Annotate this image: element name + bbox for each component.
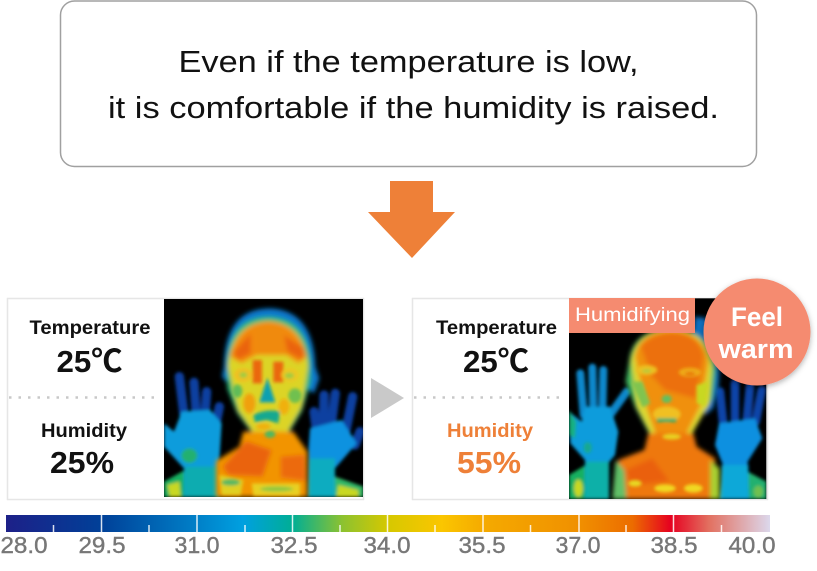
label: humidity: Humidity — [447, 421, 533, 442]
thermal image: after — [569, 298, 766, 499]
tag: humidifying — [569, 298, 695, 333]
badge: feel warm: warm — [717, 334, 794, 364]
arrow: down — [368, 181, 455, 258]
panel: after humidifying — [412, 278, 810, 500]
neck and chest — [216, 432, 307, 497]
badge: feel warm: Feel — [731, 302, 783, 332]
headline line 1: Even if the temperature is low, — [178, 44, 638, 79]
head — [692, 317, 720, 415]
scale labels: 38.5 — [650, 532, 698, 558]
scale labels: 35.5 — [458, 532, 506, 558]
value: humidity 25 percent: 25% — [50, 445, 114, 480]
callout: headline box — [60, 1, 756, 166]
scale labels: 32.5 — [270, 532, 318, 558]
scale labels — [0, 532, 776, 558]
value: temperature 25 C: 25℃ — [56, 344, 122, 379]
shoulders and hands — [569, 368, 766, 499]
colour bar — [6, 515, 770, 532]
scale labels: 40.0 — [728, 532, 776, 558]
label: temperature: Temperature — [30, 318, 150, 339]
arrow: before to after — [371, 378, 404, 418]
value: humidity 55 percent: 55% — [457, 445, 521, 480]
neck and chest — [618, 433, 715, 499]
tag: humidifying: Humidifying — [575, 304, 690, 326]
panel: before humidifying — [8, 298, 364, 500]
shoulders and hands — [164, 377, 363, 497]
scale labels: 28.0 — [0, 532, 47, 558]
scale labels: 29.5 — [78, 532, 126, 558]
scale labels: 34.0 — [364, 532, 410, 558]
temperature colour scale — [0, 515, 776, 558]
scale labels: 31.0 — [174, 532, 220, 558]
headline line 2: it is comfortable if the humidity is raised. — [108, 90, 719, 125]
head — [222, 308, 319, 393]
badge: feel warm — [704, 278, 810, 386]
facial features and chest patches — [219, 360, 302, 496]
thermal image: before — [164, 299, 363, 497]
value: temperature 25 C: 25℃ — [463, 344, 529, 379]
facial features and chest patches — [628, 365, 708, 493]
scale labels: 37.0 — [556, 532, 600, 558]
label: temperature: Temperature — [436, 318, 557, 339]
label: humidity: Humidity — [41, 421, 127, 442]
